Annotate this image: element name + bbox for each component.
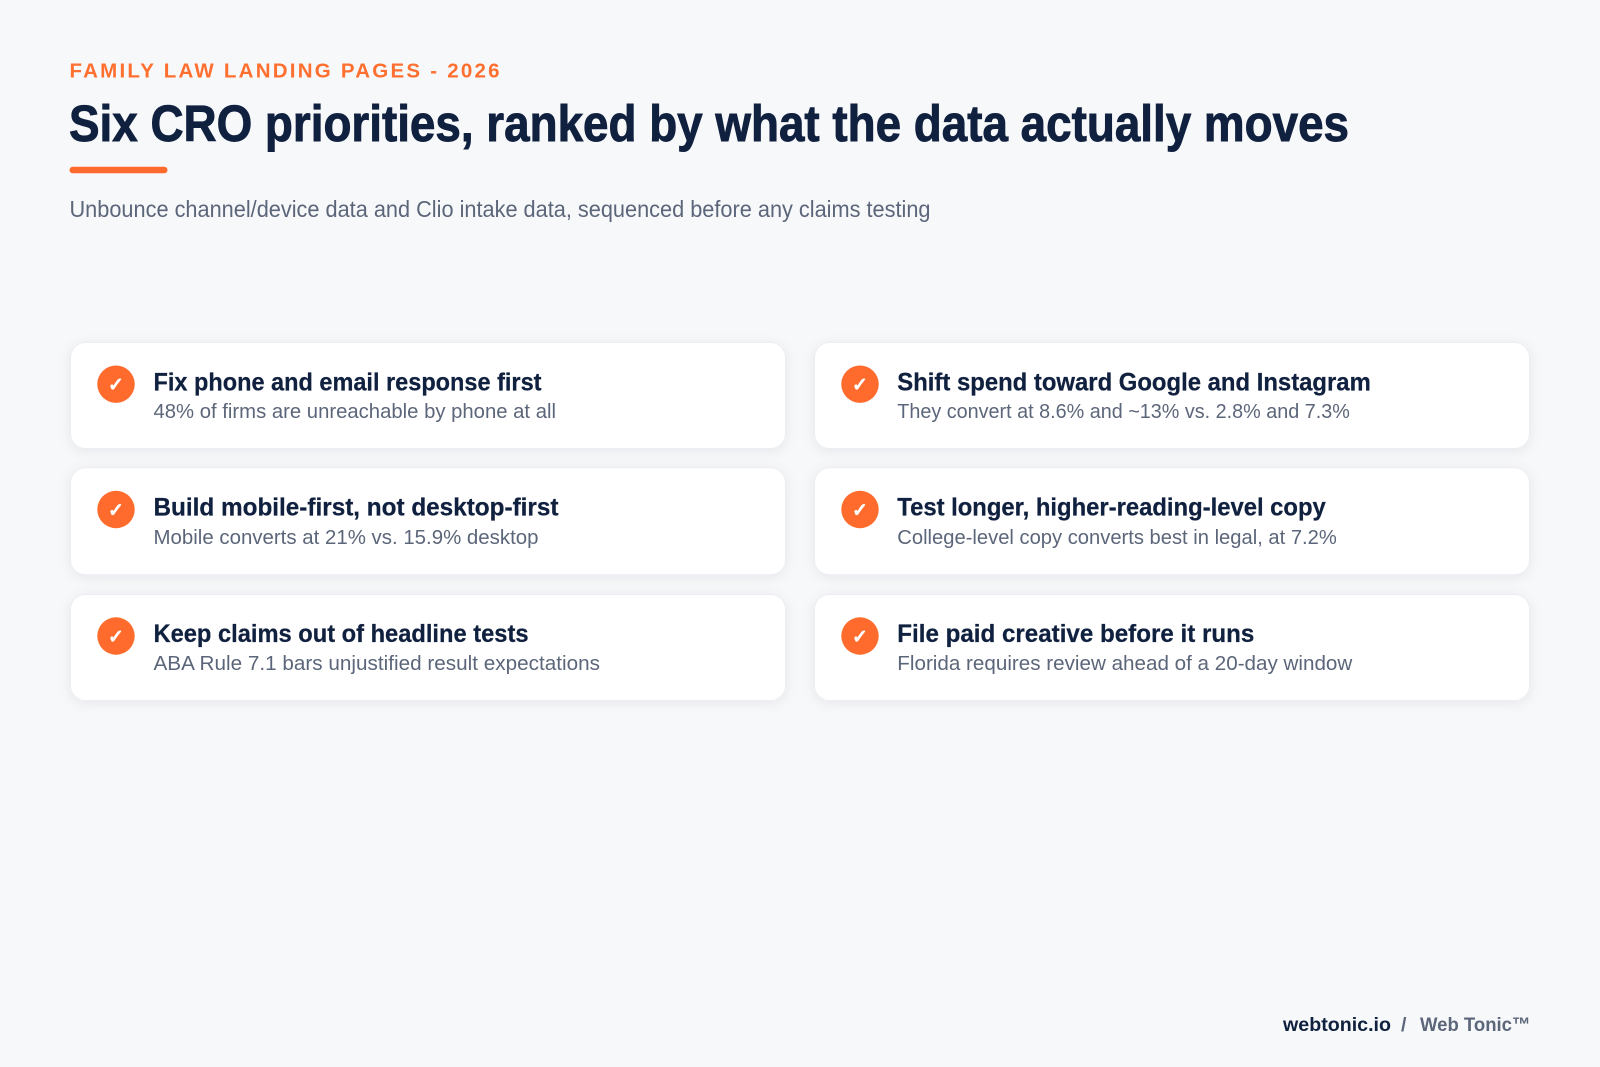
card text: 48% of firms are unreachable by phone at all: [154, 400, 556, 423]
icon: check: ✓: [108, 374, 124, 396]
icon: check: ✓: [852, 374, 868, 396]
card: fix phone and email response: [70, 342, 786, 448]
footer brand: webtonic.io: [1282, 1014, 1391, 1036]
eyebrow: FAMILY LAW LANDING PAGES - 2026: [70, 60, 500, 83]
card text: Mobile converts at 21% vs. 15.9% desktop: [154, 526, 538, 549]
card: test longer copy: [814, 468, 1530, 575]
card: shift spend: [814, 342, 1530, 448]
accent bar: [70, 167, 168, 173]
card: file paid creative: [814, 594, 1530, 700]
card text: College-level copy converts best in legal, at 7.2%: [897, 526, 1337, 549]
footer brand: Web Tonic™: [1420, 1014, 1530, 1036]
card: keep claims out: [70, 594, 786, 700]
card title: Build mobile-first, not desktop-first: [154, 494, 559, 522]
icon: check: ✓: [108, 499, 124, 521]
icon: check: ✓: [852, 626, 868, 648]
subtitle: Unbounce channel/device data and Clio intake data, sequenced before any claims testing: [70, 196, 930, 222]
card title: File paid creative before it runs: [897, 620, 1254, 648]
card text: They convert at 8.6% and ~13% vs. 2.8% and 7.3%: [897, 400, 1350, 423]
card title: Fix phone and email response first: [154, 369, 542, 397]
card: build mobile-first: [70, 468, 786, 575]
icon: check: [97, 366, 135, 403]
card text: Florida requires review ahead of a 20-day window: [897, 652, 1352, 675]
icon: check: [97, 491, 135, 528]
icon: check: [841, 366, 879, 403]
icon: check: [97, 617, 135, 655]
icon: check: [841, 617, 879, 655]
card title: Test longer, higher-reading-level copy: [897, 494, 1326, 522]
icon: check: ✓: [108, 626, 124, 648]
card title: Shift spend toward Google and Instagram: [897, 369, 1371, 397]
icon: check: ✓: [852, 499, 868, 521]
title: Six CRO priorities, ranked by what the data actually moves: [69, 95, 1349, 152]
footer brand: [1282, 1014, 1530, 1036]
icon: check: [841, 491, 879, 528]
footer brand: /: [1401, 1014, 1407, 1036]
card title: Keep claims out of headline tests: [154, 620, 528, 648]
card text: ABA Rule 7.1 bars unjustified result expectations: [154, 652, 600, 675]
